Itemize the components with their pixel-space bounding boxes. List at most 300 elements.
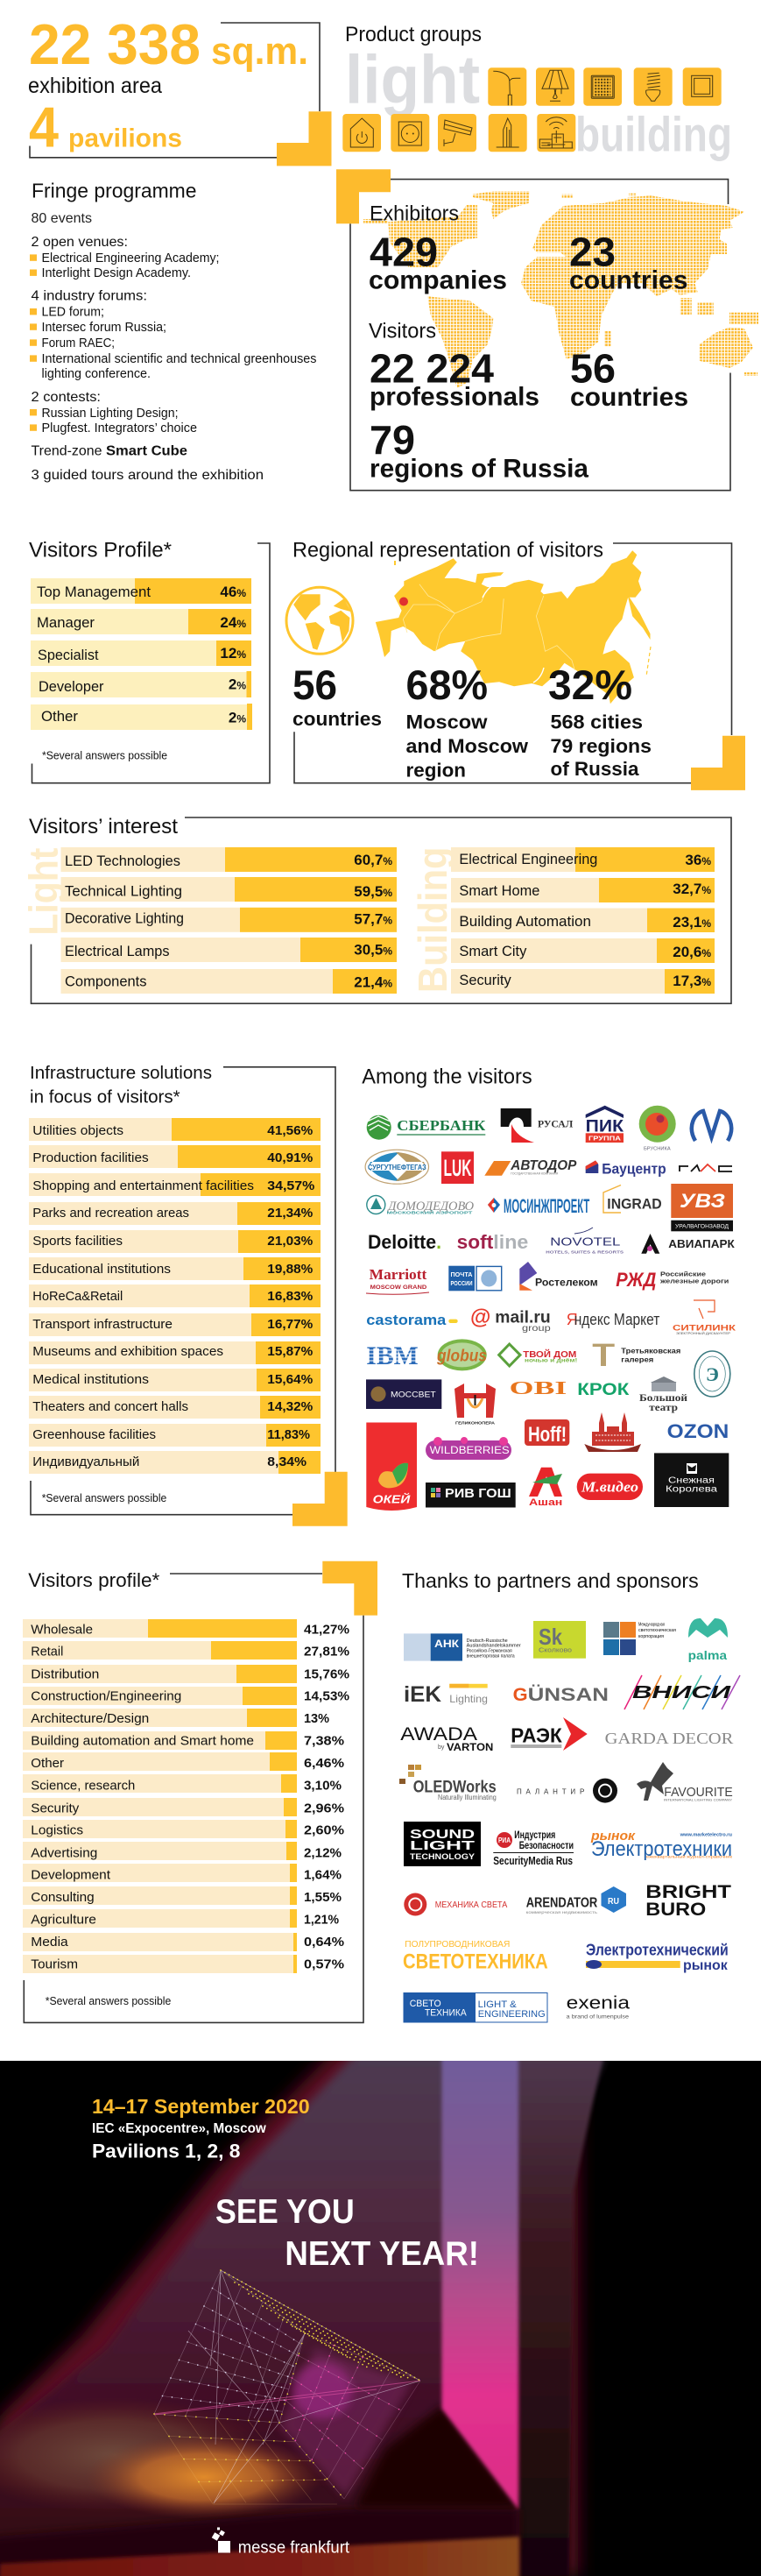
logo: AHK: внешнеторговая палата (467, 1653, 515, 1659)
logo: RAEK (511, 1717, 588, 1751)
bar: specialist (31, 640, 251, 666)
bar: distribution: 15,76% (304, 1667, 349, 1681)
logo: Semiconductor Lighting (403, 1940, 548, 1973)
logo: Brusnika: БРУСНИКА (644, 1146, 671, 1151)
list: industry forums: 4 industry forums: (32, 289, 147, 304)
logo: Softline: line (493, 1231, 528, 1253)
stat: 22 224 professionals: 22 224 (370, 346, 494, 392)
logo: Globus: globus (436, 1348, 487, 1366)
logo: Hermitage (694, 1351, 730, 1397)
logo: State Historical Museum (584, 1412, 641, 1452)
bar: construction (23, 1687, 349, 1705)
big number: 22 338 sq.m.: sq.m. (211, 30, 308, 73)
big number: 4 pavilions (29, 96, 182, 159)
icon: socket (391, 114, 429, 152)
bar: security: 17,3% (673, 973, 711, 989)
logo: Saint Petersburg metro (692, 1111, 731, 1141)
logo: Rynok Elektrotekhniki: ежеквартальный журнал-справочник (646, 1854, 732, 1859)
stat: 32% cities and regions: of Russia (550, 758, 639, 780)
logo: Auchan: Ашан (529, 1497, 562, 1508)
bar: manager (31, 609, 251, 634)
bar: media (23, 1933, 344, 1951)
logo: Tvoy Dom: ночью и днём! (525, 1358, 577, 1364)
bar: production facilities: Production facilities (32, 1150, 149, 1165)
logo: Mosinzhproekt: МОСИНЖПРОЕКТ (504, 1195, 590, 1217)
logo: Ozon: OZON (667, 1420, 729, 1442)
logo: Sberbank: СБЕРБАНК (397, 1117, 486, 1134)
logo: Globus (436, 1339, 487, 1370)
text: trend-zone smart cube (32, 443, 187, 458)
logo: Awada by Varton (400, 1724, 493, 1753)
bar: security (23, 1798, 344, 1816)
logo: Sound Light Technology: LIGHT (410, 1838, 475, 1853)
logo: Gunsan: G (513, 1685, 528, 1705)
logo: AHK: Deutsch-Russische (467, 1638, 508, 1644)
logo: Rostelecom: Ростелеком (535, 1276, 598, 1288)
logo: Bright Buro (645, 1882, 731, 1920)
logo: M.Video: М.видео (581, 1479, 638, 1496)
logo: Tretyakov Gallery: галерея (621, 1355, 653, 1363)
logo: Mekhanika Sveta: МЕХАНИКА СВЕТА (435, 1900, 508, 1910)
bar: security (451, 969, 715, 994)
logo: Novotel: NOVOTEL (550, 1235, 620, 1249)
logo: Russian Post: РОССИИ (450, 1281, 473, 1287)
bar: architecture (23, 1709, 329, 1727)
text: 80 events: 80 events (32, 211, 92, 226)
logo: Awada by Varton: AWADA (400, 1724, 477, 1744)
watermark: Light: Light (21, 848, 67, 936)
logo: Gunsan: ÜNSAN (528, 1685, 609, 1705)
logo: Palma (688, 1618, 728, 1662)
stat: 68% Moscow and Moscow region: and Moscow (406, 735, 529, 757)
bar: science (23, 1774, 342, 1793)
logo: Electrotechnical Market: Электротехнический (586, 1942, 729, 1959)
stat: 22 224 professionals: professionals (370, 382, 539, 412)
bar: consulting: Consulting (31, 1890, 95, 1905)
logo: Novotel: HOTELS, SUITES & RESORTS (546, 1250, 624, 1256)
logo: Exenia: a brand of lumenpulse (567, 2015, 630, 2020)
bar: advertising: 2,12% (304, 1845, 342, 1860)
bar: other: 6,46% (304, 1756, 344, 1771)
logo: Okey (366, 1423, 417, 1511)
panel: among the visitors (362, 1065, 736, 1511)
logo: Favourite (637, 1762, 733, 1802)
logo: Helikon Opera (454, 1384, 496, 1425)
logo: Skolkovo (533, 1621, 586, 1659)
heading: Thanks to partners and sponsors (402, 1569, 699, 1592)
heading: Among the visitors (362, 1065, 532, 1088)
logo: Russian Railways (616, 1269, 729, 1291)
stat: 32% cities and regions: 79 regions (550, 735, 652, 757)
list: contests: Plugfest. Integrators’ choice (42, 421, 197, 435)
bar: greenhouse (29, 1424, 321, 1447)
logo: PIK group: ПИК (586, 1118, 624, 1136)
text: trend-zone smart cube: Trend-zone (32, 443, 102, 458)
list: industry forums: Intersec forum Russia; (42, 321, 166, 335)
logo: Tvoy Dom: ТВОЙ ДОМ (523, 1348, 577, 1360)
slogan: see you next year (216, 2199, 476, 2266)
footnote: *Several answers possible (46, 1995, 171, 2007)
bar: smart home: Smart Home (459, 883, 539, 899)
logo: Aviapark: АВИАПАРК (668, 1237, 735, 1250)
stat: 22 224 professionals (370, 346, 539, 412)
logo: Bolshoi Theatre: Большой (639, 1391, 687, 1404)
caption: exhibition area: exhibition area (28, 74, 162, 98)
stat: 429 companies: companies (369, 265, 507, 294)
panel: exhibition area (28, 12, 331, 166)
logo: Security Media Rus: SecurityMedia Rus (493, 1854, 573, 1867)
logo: Mail.ru group (470, 1306, 551, 1334)
watermark: light: light (345, 40, 480, 117)
bar: tourism: 0,57% (304, 1957, 344, 1971)
pavilions: Pavilions 1, 2, 8 (92, 2140, 240, 2162)
bar: building automation: 7,38% (304, 1733, 344, 1748)
logo: Exenia (567, 1994, 631, 2020)
bar: retail: 27,81% (304, 1644, 349, 1660)
logo: Avtodor: ГОСУДАРСТВЕННАЯ КОМПАНИЯ (511, 1171, 558, 1176)
world dot map (363, 191, 758, 388)
bar: individual: Индивидуальный (32, 1454, 139, 1469)
list: contests: Russian Lighting Design; (42, 407, 179, 421)
bar: distribution (23, 1665, 349, 1683)
icon: flat panel (683, 67, 722, 106)
logo: Russian Railways: РЖД (616, 1269, 656, 1291)
logo: Bright Buro: BRIGHT (645, 1882, 731, 1902)
icon: security camera (438, 114, 476, 152)
heading: Regional representation of visitors (292, 538, 603, 563)
wireframe cube (154, 2270, 420, 2504)
list: industry forums: Forum RAEC; (42, 336, 115, 350)
bar: developer: Developer (39, 679, 104, 695)
bar: smart home: 32,7% (673, 881, 711, 897)
stat: 32% cities and regions: 32% (548, 662, 632, 708)
logo: IEK Lighting: Lighting (449, 1693, 488, 1705)
list: open venues: Interlight Design Academy. (42, 266, 191, 280)
icon: energy saving bulb (634, 67, 673, 106)
bar: security: Security (31, 1801, 80, 1815)
stat: 79 regions of Russia: regions of Russia (370, 455, 588, 484)
logo: Domodedovo: ДОМОДЕДОВО (386, 1200, 474, 1214)
bar: other (23, 1752, 344, 1771)
bar: building automation (23, 1731, 344, 1750)
logo: Favourite: INTERNATIONAL LIGHTING COMPANY (664, 1799, 733, 1802)
logo: Arendator: коммерческая недвижимость (526, 1911, 598, 1915)
text: guided tours: 3 guided tours around the exhibition (32, 468, 264, 483)
bar: other (31, 704, 252, 730)
stat: 56 countries: countries (570, 383, 688, 412)
logo: Mail.ru group: @ (470, 1306, 490, 1329)
logo: Avtodor (484, 1158, 577, 1176)
logo: UVZ: УВЗ (680, 1190, 725, 1212)
stat: 68% Moscow and Moscow region: region (406, 759, 466, 781)
logo: Ingrad: INGRAD (607, 1195, 662, 1212)
logo: Palma: palma (688, 1648, 727, 1662)
bar: electrical engineering (451, 847, 715, 872)
list: open venues (30, 235, 219, 280)
bar: building automation (451, 908, 715, 932)
logo: Yandex Market: Я (567, 1311, 578, 1328)
panel: exhibitors and visitors (336, 169, 758, 491)
logo: Awada by Varton: VARTON (447, 1741, 493, 1753)
logo: Rusal: РУСАЛ (538, 1118, 573, 1130)
logo: Sound Light Technology (404, 1822, 481, 1866)
heading (30, 1064, 212, 1108)
logo: IBM: IBM (366, 1341, 419, 1370)
big number: 22 338 sq.m. (29, 12, 308, 76)
bar: components: Components (65, 973, 147, 989)
logo: Aviapark (641, 1234, 735, 1254)
logo: Hermitage: Э (706, 1363, 719, 1385)
stat: 23 countries (569, 229, 688, 294)
bar: medical: 15,64% (267, 1372, 313, 1387)
logo: AHK: АНК (434, 1638, 460, 1650)
logo: Tretyakov Gallery (593, 1344, 680, 1366)
bar: wholesale (23, 1619, 349, 1638)
heading: fringe programme: Fringe programme (32, 180, 196, 202)
logo: Rynok Elektrotekhniki: рынок (590, 1829, 636, 1844)
list: open venues: 2 open venues: (32, 235, 128, 250)
logo: Rynok Elektrotekhniki: Электротехники (591, 1837, 732, 1861)
logo: Snow Queen (654, 1453, 729, 1507)
bar: museums: Museums and exhibition spaces (32, 1344, 223, 1359)
logo: Gunsan (513, 1685, 609, 1705)
panel: footer see you next year (0, 2050, 761, 2576)
bar: architecture: 13% (304, 1711, 329, 1726)
logo: Awada by Varton: by (438, 1744, 445, 1751)
list: contests: 2 contests: (32, 390, 101, 405)
bar: retail (23, 1641, 349, 1660)
logo: Riv Gauche: РИВ ГОШ (445, 1486, 511, 1501)
bar: horeca: HoReCa&Retail (32, 1289, 123, 1304)
bar: wholesale: Wholesale (31, 1622, 93, 1637)
bar: advertising (23, 1842, 342, 1860)
slogan: see you next year: SEE YOU (215, 2193, 355, 2231)
heading: Visitors profile* (28, 1569, 160, 1591)
bar: distribution: Distribution (31, 1667, 99, 1681)
bar: other: Other (41, 709, 78, 725)
heading: product groups: Product groups (345, 23, 482, 46)
bar: tourism (23, 1955, 344, 1973)
bar: logistics (23, 1820, 344, 1838)
bar: museums (29, 1341, 321, 1364)
stat: 79 regions of Russia (370, 417, 588, 484)
bar: LED technologies: LED Technologies (65, 853, 180, 869)
bar: building automation: Building automation and Smart home (31, 1733, 254, 1748)
logo: Arendator: ARENDATOR (526, 1895, 598, 1910)
logo: Security Media Rus (493, 1829, 574, 1867)
bar: developer: 2% (229, 676, 246, 692)
bar: construction: Construction/Engineering (31, 1688, 181, 1703)
bar: theaters: Theaters and concert halls (32, 1399, 188, 1414)
logo: Auchan (529, 1468, 562, 1508)
bar: educational: Educational institutions (32, 1262, 171, 1277)
bar: electrical engineering: Electrical Engineering (459, 852, 597, 867)
logo: Skolkovo: Sk (539, 1624, 562, 1650)
logo: Mail.ru group: group (522, 1323, 551, 1334)
logo: Hoff: Hoff! (528, 1423, 567, 1447)
logo: Lukoil: LUK (443, 1155, 472, 1181)
logo: Electrotechnical Market: рынок (683, 1958, 729, 1973)
icon: globe (286, 587, 353, 654)
bar: science: Science, research (31, 1779, 135, 1793)
logo: Rostelecom (519, 1262, 598, 1291)
bar: other: 2% (229, 710, 246, 725)
logo: Surgutneftegas: СУРГУТНЕФТЕГАЗ (368, 1164, 426, 1171)
logo: Ingrad (603, 1185, 662, 1213)
logo: Security Media Rus: Безопасности (519, 1839, 574, 1851)
list: industry forums (30, 289, 317, 381)
corner accent (322, 1561, 377, 1616)
corner accent (336, 169, 391, 223)
corner accent (292, 1472, 348, 1526)
logo: OBI: OBI (510, 1377, 567, 1398)
logo: Skolkovo: Сколково (539, 1647, 572, 1654)
bar: top management (31, 578, 251, 604)
logo: Russian Post: ПОЧТА (450, 1272, 473, 1278)
logo: Rynok Elektrotekhniki (590, 1829, 732, 1861)
panel: visitors interest (21, 815, 731, 1003)
bar: specialist: 12% (220, 645, 246, 662)
logo: Arendator (526, 1886, 626, 1915)
logo: Surgutneftegas (365, 1150, 428, 1184)
logo: Lukoil (441, 1151, 474, 1184)
watermark: building: building (575, 107, 732, 162)
bar: agriculture: Agriculture (31, 1912, 96, 1927)
bar: logistics: 2,60% (304, 1822, 344, 1838)
logo: M.Video (577, 1474, 643, 1500)
stat: 68% Moscow and Moscow region: Moscow (406, 711, 488, 733)
footnote: *Several answers possible (42, 750, 167, 762)
logo: messe frankfurt (212, 2527, 349, 2553)
bar: smart city (451, 938, 715, 963)
stat: 429 companies: 429 (370, 229, 438, 274)
bar: educational (29, 1257, 321, 1280)
bar: technical lighting (61, 877, 397, 902)
map: Russia (376, 550, 651, 704)
big number: 22 338 sq.m.: 22 338 (29, 12, 201, 76)
bar: utilities objects: 41,56% (267, 1123, 313, 1138)
bar: decorative lighting: Decorative Lighting (65, 911, 184, 927)
logo: PIK group (586, 1106, 624, 1143)
logo: AHK: Auslandshandelskammer (467, 1644, 521, 1649)
bar: educational: 19,88% (267, 1262, 313, 1277)
bar: production facilities (29, 1145, 321, 1168)
heading: Infrastructure solutions (30, 1064, 212, 1083)
bar: wholesale: 41,27% (304, 1622, 349, 1637)
list: industry forums: lighting conference. (42, 367, 151, 381)
bar: tourism: Tourism (31, 1957, 78, 1971)
logo: Citilink: СИТИЛИНК (673, 1323, 736, 1333)
list: industry forums: International scientific and technical greenhouses (42, 352, 317, 366)
logo: Semiconductor Lighting: ПОЛУПРОВОДНИКОВАЯ (405, 1940, 510, 1950)
bar: media: 0,64% (304, 1935, 344, 1950)
logo: OLEDWorks: Naturally Illuminating (438, 1794, 497, 1801)
heading: Visitors Profile* (29, 538, 172, 563)
logo: Marriott (366, 1266, 429, 1294)
bar: building automation: 23,1% (673, 914, 711, 931)
logo: Mosinzhproekt (488, 1195, 590, 1217)
bar: utilities objects: Utilities objects (32, 1123, 123, 1138)
bar: electrical lamps: Electrical Lamps (65, 944, 170, 959)
stat: 56 countries (292, 662, 382, 730)
stat: 56 countries: countries (292, 708, 382, 730)
bar: top management: 46% (220, 584, 246, 600)
bar: components: 21,4% (354, 973, 392, 990)
bar: parks: Parks and recreation areas (32, 1206, 189, 1221)
logo: Baucenter: Бауцентр (602, 1160, 666, 1177)
logo: Wildberries (426, 1437, 511, 1460)
bar: greenhouse: Greenhouse facilities (32, 1427, 156, 1442)
heading: in focus of visitors* (30, 1088, 180, 1108)
bar: shopping: 34,57% (267, 1178, 314, 1193)
bar: consulting: 1,55% (304, 1890, 342, 1905)
bar: theaters: 14,32% (267, 1399, 313, 1414)
corner accent (691, 736, 745, 790)
stat: 79 regions of Russia: 79 (370, 417, 415, 463)
logo: IEK Lighting: iEK (404, 1682, 441, 1707)
panel: partners and sponsors (399, 1569, 740, 2022)
bar: building automation: Building Automation (459, 914, 591, 930)
logo: Hals (679, 1164, 732, 1171)
logo: AHK (404, 1633, 521, 1661)
logo: Tretyakov Gallery: Третьяковская (621, 1346, 680, 1355)
bar: smart home (451, 878, 715, 902)
venue: IEC «Expocentre», Moscow (92, 2121, 267, 2136)
stat: 68% Moscow and Moscow region: 68% (406, 662, 488, 708)
heading: visitors: Visitors (369, 319, 436, 343)
footnote: *Several answers possible (42, 1492, 166, 1504)
bar: consulting (23, 1886, 342, 1905)
logo: Svetotekhnika Light and Engineering (404, 1992, 547, 2022)
bar: smart city: Smart City (459, 944, 527, 959)
logo: Exenia: exenia (567, 1994, 631, 2013)
logo: Bright Buro: BURO (645, 1900, 706, 1920)
bar: top management: Top Management (37, 584, 151, 600)
icon: tower (489, 114, 527, 152)
panel: infrastructure solutions (29, 1064, 348, 1526)
logo: Rynok Elektrotekhniki: www.marketelectro.ru (680, 1833, 732, 1838)
bar: individual: 8,34% (267, 1454, 307, 1469)
logo: Mekhanika Sveta (404, 1893, 508, 1915)
logo: Palantir (517, 1779, 617, 1803)
logo: Bolshoi Theatre: театр (649, 1401, 678, 1413)
date: 14-17 September 2020: 14–17 September 2020 (92, 2095, 310, 2118)
bar: construction: 14,53% (304, 1688, 349, 1703)
logo: Domodedovo: МОСКОВСКИЙ АЭРОПОРТ (387, 1209, 473, 1215)
marker: Moscow (399, 598, 408, 606)
bar: transport: Transport infrastructure (32, 1317, 173, 1332)
list: contests (30, 390, 197, 435)
logo: IEK Lighting (404, 1682, 488, 1707)
bar: production facilities: 40,91% (267, 1150, 313, 1165)
logo: Okey: ОКЕЙ (373, 1491, 411, 1505)
logo: UVZ: УРАЛВАГОНЗАВОД (675, 1225, 729, 1230)
bar: transport (29, 1313, 321, 1336)
panel: visitors profile by sector (23, 1561, 377, 2022)
logo: Mossvet (366, 1379, 441, 1409)
logo: Svetotekhnika Light and Engineering: CBETO (410, 1999, 441, 2009)
bar: technical lighting: Technical Lighting (65, 883, 182, 899)
bar: parks: 21,34% (267, 1206, 313, 1221)
bar: electrical lamps (61, 938, 397, 962)
logo: OLEDWorks (399, 1765, 497, 1801)
corner accent (277, 111, 331, 166)
bar: parks (29, 1202, 321, 1225)
logo: Garda Decor: GARDA DECOR (605, 1730, 733, 1747)
logo: Snow Queen: Снежная (668, 1476, 715, 1486)
logo: Electrotechnical Market (586, 1942, 729, 1973)
background (0, 2061, 761, 2576)
